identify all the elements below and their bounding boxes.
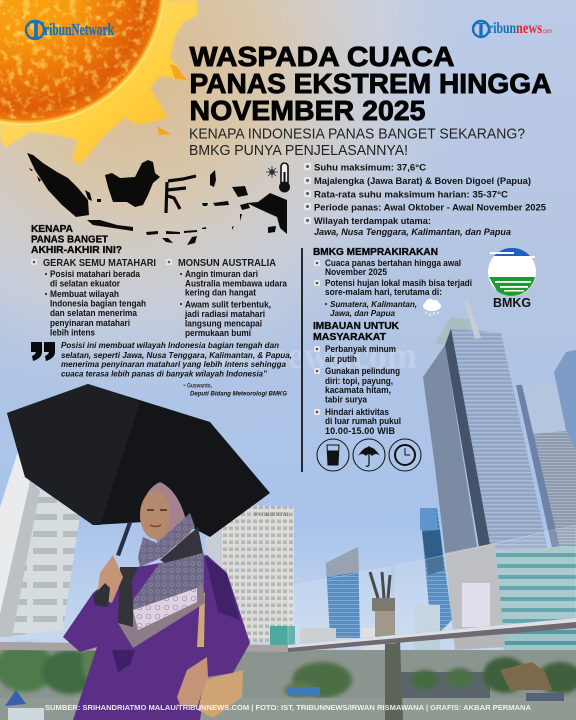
quote text: selatan, seperti Jawa, Nusa Tenggara, Kalimantan, & Papua,: [61, 351, 292, 360]
umbrella: [7, 384, 270, 556]
icon: rain cloud: [423, 299, 441, 316]
title: WASPADA CUACA: [190, 41, 454, 72]
facts text: Periode panas: Awal Oktober - Awal November 2025: [314, 202, 546, 212]
logo: Tribunnews: .com: [542, 29, 552, 35]
icon: clock: [389, 439, 421, 471]
hijab: [140, 482, 195, 545]
panel: BMKG forecast: Cuaca panas bertahan hingga awal: [325, 258, 461, 268]
bag strap: [197, 593, 205, 647]
map of Indonesia: [27, 153, 287, 245]
panel: monsun australia: langsung mencapai: [185, 318, 262, 328]
icon: bullets: [304, 163, 311, 224]
BMKG logo: BMKG: [493, 295, 531, 310]
panel: BMKG forecast: [313, 246, 472, 318]
pale background towers: [516, 350, 576, 560]
panel: public advice: IMBAUAN UNTUK: [313, 320, 399, 332]
scarf: [118, 513, 205, 648]
BCA tower: [423, 300, 548, 553]
panel: BMKG forecast: Jawa, dan Papua: [330, 309, 396, 318]
metal railing: [0, 618, 576, 652]
panel: public advice: MASYARAKAT: [313, 331, 387, 343]
panel: public advice: di luar rumah pukul: [325, 416, 401, 426]
logo: Tribunnews: news: [516, 20, 542, 37]
hand holding umbrella: [97, 555, 123, 603]
title: PANAS EKSTREM HINGGA: [190, 68, 552, 99]
facts text: Suhu maksimum: 37,6°C: [314, 162, 427, 172]
panel: public advice: Perbanyak minum: [325, 344, 396, 354]
panel: gerak semu matahari: lebih intens: [50, 328, 95, 338]
logo: Tribunnews: [473, 18, 552, 42]
panel: public advice: diri: topi, payung,: [325, 376, 393, 386]
panel: BMKG forecast: November 2025: [325, 267, 387, 277]
quote attribution: [183, 382, 287, 398]
panel: public advice: Hindari aktivitas: [325, 407, 389, 417]
panel: gerak semu matahari: Indonesia bagian tengah: [50, 298, 146, 308]
quote attribution: ~ Guswanto,: [183, 382, 212, 390]
quote attribution: Deputi Bidang Meteorologi BMKG: [190, 390, 287, 398]
photo: woman with umbrella: [7, 384, 270, 720]
panel: heat facts: [304, 162, 546, 237]
handbag: [198, 670, 243, 718]
icon: thermometer and sun: [266, 163, 290, 192]
facts text: [314, 162, 546, 237]
icon: umbrella: [353, 439, 385, 471]
quote text: menerima penyinaran matahari yang lebih intens sehingga: [61, 360, 287, 369]
panel: gerak semu matahari: di selatan ekuator: [50, 278, 120, 288]
panel: public advice: 10.00-15.00 WIB: [325, 426, 396, 436]
panel: BMKG forecast: sore-malam hari, terutama di:: [325, 287, 442, 297]
logo: Tribun Network: T: [28, 18, 44, 44]
quote text: cuaca terasa lebih panas di banyak wilayah Indonesia”: [61, 370, 267, 378]
title: NOVEMBER 2025: [190, 95, 426, 126]
panel: BMKG forecast: Sumatera, Kalimantan,: [330, 300, 417, 309]
subtitle: BMKG PUNYA PENJELASANNYA!: [189, 143, 408, 159]
logo: Tribun Network: [26, 18, 114, 44]
heading: why so hot: PANAS BANGET: [31, 234, 109, 246]
heading: why so hot: [31, 223, 122, 256]
panel: monsun australia: Angin timuran dari: [185, 269, 258, 279]
panel: public advice: tabir surya: [325, 394, 368, 404]
facts text: Jawa, Nusa Tenggara, Kalimantan, dan Papua: [314, 227, 511, 237]
facts text: Wilayah terdampak utama:: [314, 216, 431, 226]
hand on bag: [177, 657, 208, 707]
panel: monsun australia: [166, 258, 288, 338]
logo: Tribunnews: T: [474, 18, 488, 42]
statue and column: [370, 572, 403, 720]
icon: glass of water: [317, 439, 349, 471]
panel: gerak semu matahari: GERAK SEMU MATAHARI: [43, 258, 156, 269]
quote text: Posisi ini membuat wilayah Indonesia bagian tengah dan: [61, 341, 279, 350]
photo: city skyline: [0, 300, 576, 720]
sun: [0, 0, 198, 165]
panel: public advice: [313, 320, 401, 436]
hotel building: IN ORIENTAL: [254, 512, 291, 518]
panel: public advice: Gunakan pelindung: [325, 366, 400, 376]
facts text: Majalengka (Jawa Barat) & Boven Digoel (Papua): [314, 176, 531, 186]
teal building: [445, 543, 576, 660]
subtitle: KENAPA INDONESIA PANAS BANGET SEKARANG?: [189, 126, 525, 142]
logo: Tribunnews: ribun: [488, 20, 516, 37]
panel: public advice: air putih: [325, 354, 357, 364]
source credit: SUMBER: SRIHANDRIATMO MALAU/TRIBUNNEWS.COM | FOTO: IST, TRIBUNNEWS/IRWAN RISMAWANA | GRAFIS: AKBAR PERMANA: [45, 703, 532, 712]
panel: BMKG forecast: BMKG MEMPRAKIRAKAN: [313, 246, 438, 258]
panel: monsun australia: Australia membawa udara: [185, 278, 288, 288]
title: [190, 41, 552, 126]
panel: gerak semu matahari: Posisi matahari berada: [50, 269, 141, 279]
panel: monsun australia: jadi radiasi matahari: [184, 309, 265, 319]
blue glass towers: [326, 508, 452, 640]
glass railing panels: [288, 525, 576, 645]
BMKG logo: [488, 248, 536, 310]
subtitle: [189, 126, 525, 159]
small low buildings: [270, 605, 440, 676]
panel: public advice: kacamata hitam,: [325, 385, 391, 395]
panel: BMKG forecast: Potensi hujan lokal masih bisa terjadi: [325, 278, 472, 288]
face: [140, 491, 170, 539]
panel: gerak semu matahari: dan selatan menerima: [50, 308, 138, 318]
panel: monsun australia: Awam sulit terbentuk,: [185, 300, 271, 310]
panel: gerak semu matahari: Membuat wilayah: [50, 289, 119, 299]
left white tower: [0, 445, 80, 637]
shirt: [63, 555, 250, 720]
lower street, trees and water: [0, 644, 576, 720]
panel: monsun australia: MONSUN AUSTRALIA: [178, 258, 276, 269]
panel: monsun australia: kering dan hangat: [185, 288, 256, 298]
heading: why so hot: AKHIR-AKHIR INI?: [31, 244, 122, 256]
sun flares: [0, 0, 198, 165]
panel: gerak semu matahari: penyinaran matahari: [50, 318, 130, 328]
facts text: Rata-rata suhu maksimum harian: 35-37°C: [314, 190, 509, 200]
logo: Tribun Network: ribunNetwork: [44, 20, 114, 39]
watermark: Tribunnews.com: [160, 335, 417, 377]
quote marks: [31, 342, 55, 361]
hotel building: [205, 505, 294, 642]
panel: monsun australia: permukaan bumi: [185, 328, 251, 338]
quote text: [61, 341, 292, 378]
heading: why so hot: KENAPA: [31, 223, 73, 235]
panel: gerak semu matahari: [31, 258, 156, 338]
